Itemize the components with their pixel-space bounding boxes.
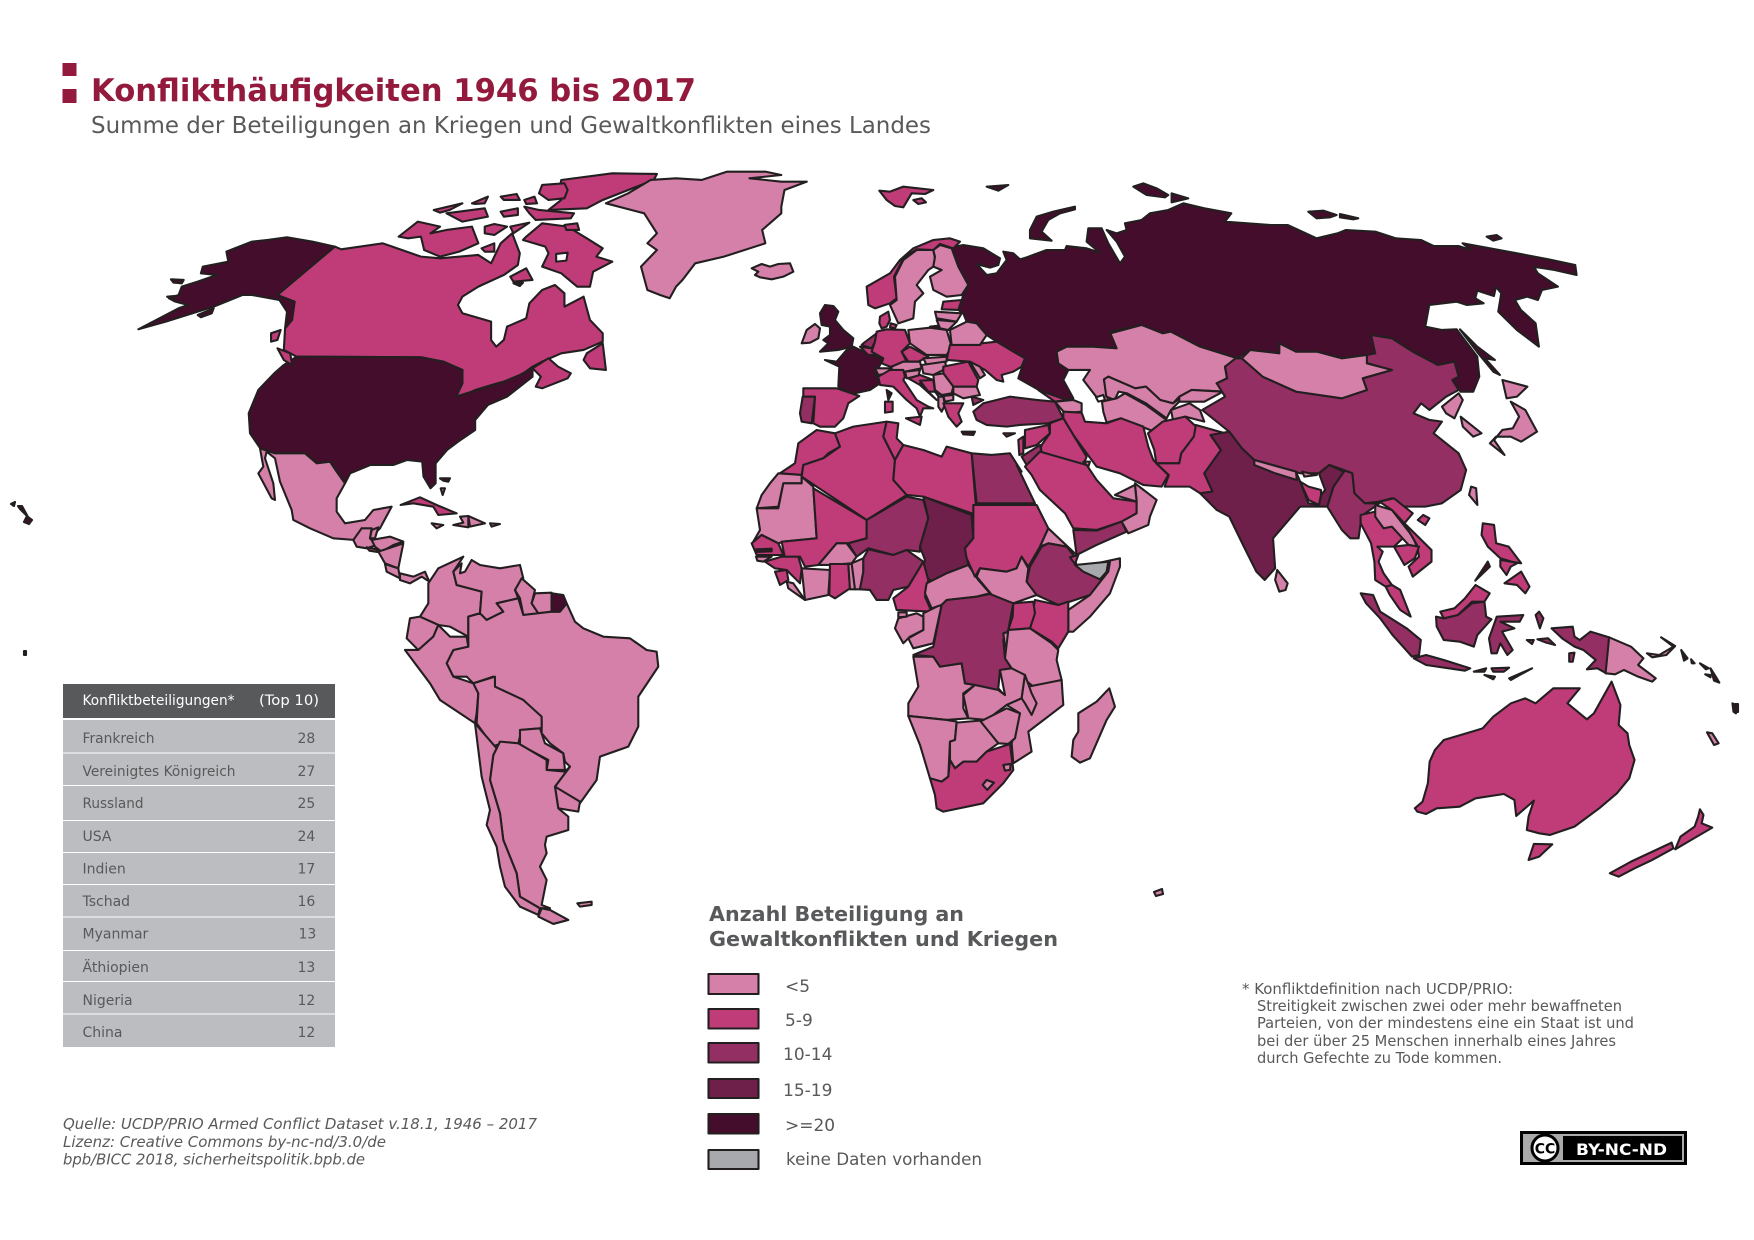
row: Frankreich: Frankreich — [82, 731, 154, 747]
Iberia — [803, 388, 859, 427]
region: North America — [138, 172, 807, 488]
row: Nigeria: Nigeria — [82, 993, 133, 1009]
row: China — [63, 1014, 335, 1047]
world map — [11, 172, 1738, 924]
row: Frankreich: 28 — [298, 731, 315, 747]
legend item: 5-9 — [708, 1009, 813, 1031]
British Isles and France — [820, 305, 853, 352]
row: Tschad: 16 — [298, 894, 315, 910]
legend item: under 5 — [708, 974, 810, 997]
row: Äthiopien: Äthiopien — [82, 958, 149, 976]
row: China: 12 — [298, 1025, 315, 1041]
legend — [708, 902, 1058, 1170]
row: Myanmar: Myanmar — [82, 926, 149, 942]
legend item: 10-14 — [708, 1043, 832, 1065]
licence badge: CC BY-NC-ND: CC — [1535, 1142, 1555, 1158]
legend title: Anzahl Beteiligung an — [709, 902, 964, 926]
North Africa — [780, 430, 840, 475]
table header: (Top 10) — [259, 693, 319, 709]
licence badge: CC BY-NC-ND: BY-NC-ND — [1576, 1140, 1667, 1159]
title: Konflikthäufigkeiten 1946 bis 2017 — [91, 73, 696, 109]
footnote: conflict definition: durch Gefechte zu Tode kommen. — [1257, 1049, 1502, 1067]
legend item: under 5: <5 — [785, 977, 810, 997]
footnote: conflict definition: bei der über 25 Menschen innerhalb eines Jahres — [1257, 1032, 1616, 1050]
region: Southeast Asia and Oceania — [1361, 585, 1736, 877]
Russia — [952, 203, 1577, 400]
footnote: conflict definition: Parteien, von der mindestens eine ein Staat ist und — [1257, 1014, 1634, 1032]
legend item: no data: keine Daten vorhanden — [786, 1150, 982, 1170]
row: China: China — [82, 1025, 122, 1041]
source note: bpb/BICC 2018, sicherheitspolitik.bpb.de — [63, 1150, 365, 1168]
row: USA: USA — [82, 829, 112, 845]
row: USA — [63, 821, 335, 852]
row: Vereinigtes Königreich: Vereinigtes Königreich — [82, 764, 236, 780]
row: Nigeria — [63, 982, 335, 1014]
footnote: conflict definition: * Konfliktdefinition nach UCDP/PRIO: — [1242, 980, 1513, 998]
row: Russland — [63, 786, 335, 820]
legend title — [709, 902, 1058, 951]
legend item: 5-9: 5-9 — [785, 1011, 813, 1031]
region: Central and South America — [258, 448, 658, 924]
Central Europe — [862, 333, 877, 348]
table: Top 10 conflict participations — [63, 684, 335, 1047]
row: Tschad: Tschad — [82, 894, 130, 910]
Caucasus, Kazakhstan, Middle East — [1038, 390, 1067, 402]
table header — [63, 684, 335, 718]
row: Russland: 25 — [298, 796, 315, 812]
row: Frankreich — [63, 720, 335, 752]
row: Äthiopien — [63, 951, 335, 981]
source note — [63, 1115, 537, 1168]
legend item: 20 and more: >=20 — [785, 1116, 835, 1136]
legend item: 10-14: 10-14 — [783, 1045, 832, 1065]
legend item: 20 and more — [708, 1114, 835, 1136]
footnote: conflict definition: Streitigkeit zwischen zwei oder mehr bewaffneten — [1257, 997, 1622, 1015]
licence badge: CC BY-NC-ND — [1520, 1131, 1687, 1165]
row: Myanmar: 13 — [298, 926, 316, 942]
source note: Lizenz: Creative Commons by-nc-nd/3.0/de — [63, 1133, 386, 1151]
region: Sub-Saharan Africa — [752, 473, 1120, 812]
region: Europe, Russia and North Africa — [752, 183, 1577, 555]
legend item: 15-19: 15-19 — [783, 1081, 832, 1101]
legend item: 15-19 — [708, 1079, 832, 1101]
row: Vereinigtes Königreich: 27 — [298, 764, 315, 780]
source note: Quelle: UCDP/PRIO Armed Conflict Dataset v.18.1, 1946 – 2017 — [63, 1115, 537, 1133]
row: Myanmar — [63, 918, 335, 950]
row: USA: 24 — [298, 829, 315, 845]
small islands — [11, 502, 1738, 896]
subtitle: Summe der Beteiligungen an Kriegen und Gewaltkonflikten eines Landes — [91, 113, 931, 139]
row: Indien — [63, 853, 335, 884]
row: Tschad — [63, 885, 335, 916]
region: Asia — [1156, 335, 1537, 617]
row: Äthiopien: 13 — [298, 960, 315, 976]
legend title: Gewaltkonflikten und Kriegen — [709, 927, 1058, 951]
title marker squares — [62, 63, 76, 103]
row: Indien: Indien — [82, 862, 126, 878]
row: Vereinigtes Königreich — [63, 754, 335, 785]
row: Russland: Russland — [82, 796, 144, 812]
row: Nigeria: 12 — [298, 993, 315, 1009]
row: Indien: 17 — [298, 862, 315, 878]
footnote: conflict definition — [1242, 980, 1634, 1067]
Scandinavia — [867, 238, 960, 308]
table header: Konfliktbeteiligungen* — [82, 693, 234, 709]
